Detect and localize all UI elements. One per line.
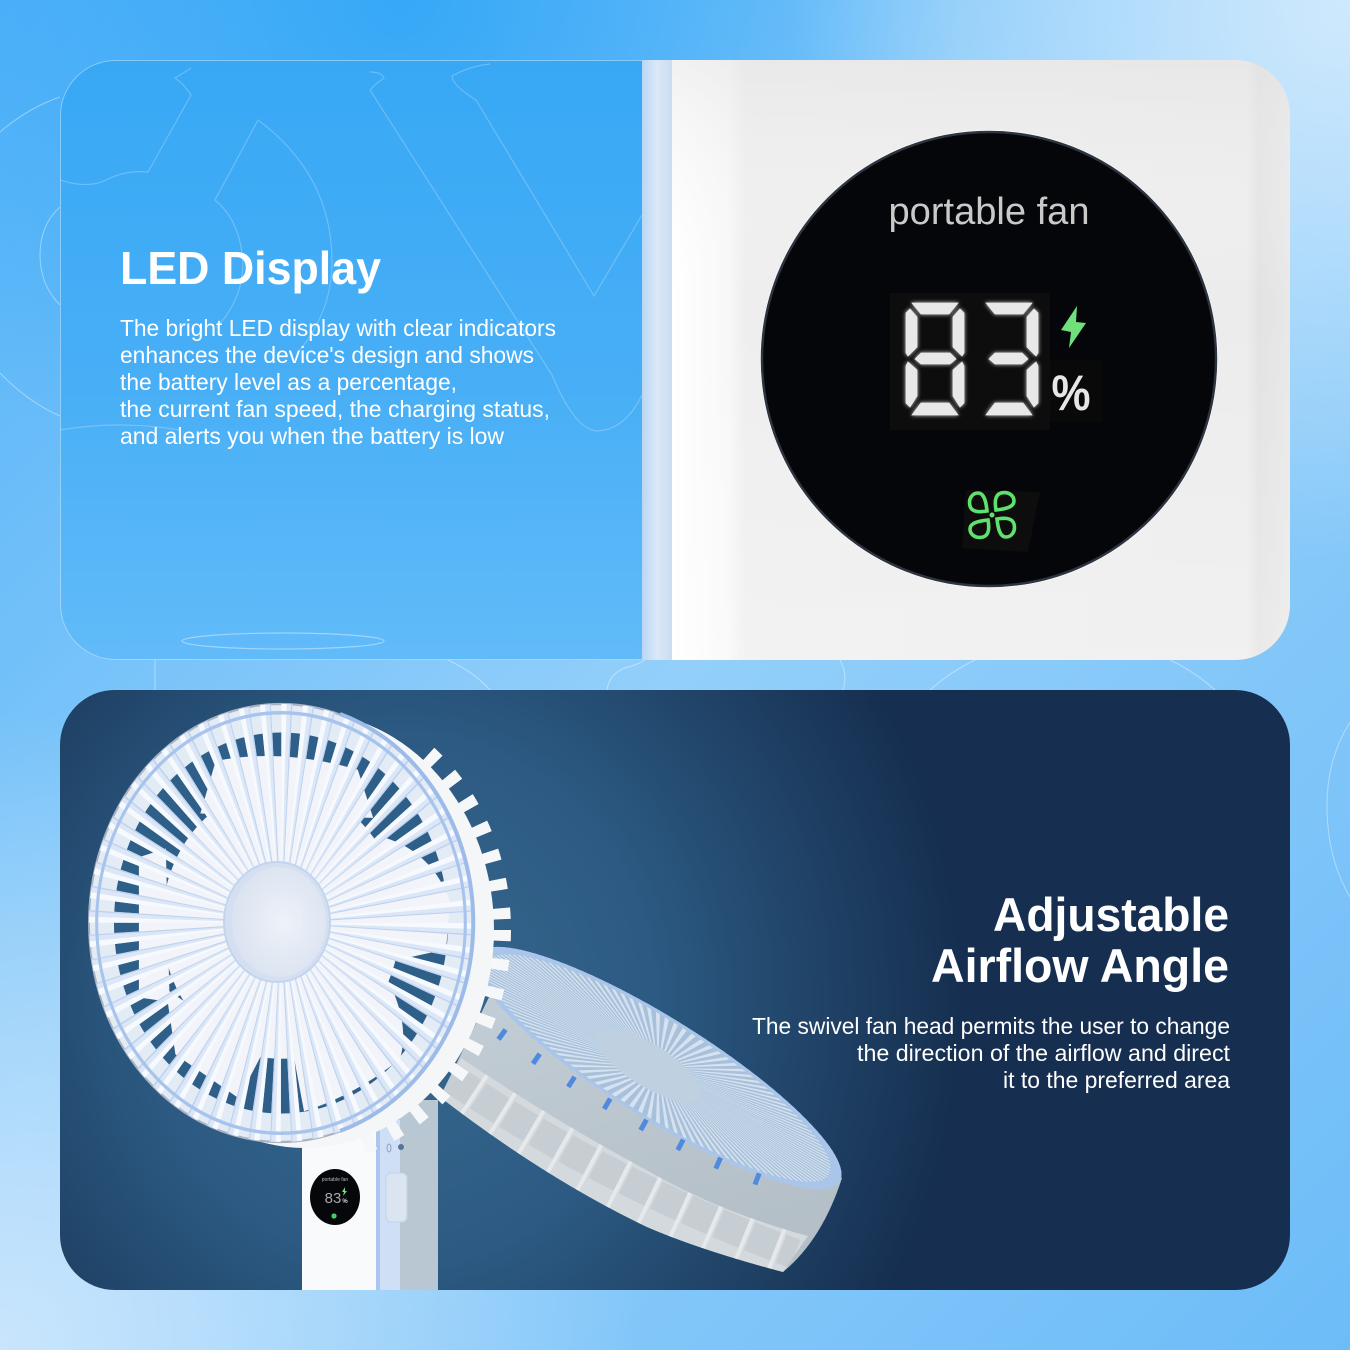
heading: Adjustable Airflow Angle [931,888,1229,992]
stand back [397,1100,438,1290]
grille spokes [162,787,400,1059]
stand side [380,1120,400,1290]
text block: LED description: the current fan speed, the charging status, [120,396,550,422]
text block: airflow description: it to the preferred area [1003,1067,1230,1093]
right rim accent [340,714,473,1131]
text block: airflow description [752,1013,1231,1093]
display label: portable fan [888,191,1090,233]
heading: Adjustable Airflow Angle: Airflow Angle [931,939,1229,992]
outer ring [89,704,473,1142]
mini bolt [342,1187,347,1196]
panel: LED display [60,60,1290,660]
text block: LED description: and alerts you when the battery is low [120,423,504,449]
text block: LED description: the battery level as a percentage, [120,369,457,395]
stand front [302,1130,376,1290]
panel background: blue [60,60,650,660]
text block: airflow description: the direction of the airflow and direct [857,1040,1231,1066]
blue rim ticks [500,1033,786,1189]
fan side grille [444,1058,808,1272]
percent sign: % [1052,365,1090,421]
mini display label: portable fan [322,1177,348,1183]
percent backing [1050,360,1102,422]
heading: LED Display: LED Display [120,242,381,294]
fan top face [488,946,842,1190]
side icons [398,1144,404,1150]
mini display [310,1169,360,1225]
fan side body [440,985,842,1272]
panel outline [60,60,642,660]
mini display digits: 83 [325,1190,341,1207]
product photo surface [672,60,1290,660]
hub rim [224,862,330,982]
text block: airflow description: The swivel fan head permits the user to change [752,1013,1230,1039]
round display [760,130,1218,588]
stand blue edge [376,1125,380,1290]
seven segment digits: 83 [906,303,1038,415]
text block: LED description: The bright LED display with clear indicators [120,315,556,341]
rear housing teeth [376,748,511,1150]
side button [386,1173,407,1222]
icon: charging bolt [1061,306,1086,348]
fan stand [302,1100,438,1290]
fan blades behind the grille [139,756,450,1111]
text block: LED description: enhances the device's design and shows [120,342,534,368]
rear housing [260,723,494,1148]
panel background: navy [60,690,1290,1290]
grille seen from the front [89,704,473,1142]
translucent product strip [642,60,672,660]
fan top hub [595,1028,701,1102]
panel: adjustable airflow angle [60,690,1290,1290]
heading: Adjustable Airflow Angle: Adjustable [993,888,1229,941]
icon: green fan [962,490,1040,552]
display bezel [760,130,1218,588]
hub cap [232,867,326,977]
mini display percent: % [342,1199,348,1205]
watermark outlines [60,64,642,649]
background outline pattern [0,97,1350,897]
tilted fan head [444,946,842,1272]
digit backing [890,293,1050,430]
rim highlight [97,713,465,1133]
text block: LED description [120,315,556,449]
open gap behind the blades [114,732,448,1114]
mini fan icon [331,1213,337,1219]
front fan head [89,704,502,1155]
